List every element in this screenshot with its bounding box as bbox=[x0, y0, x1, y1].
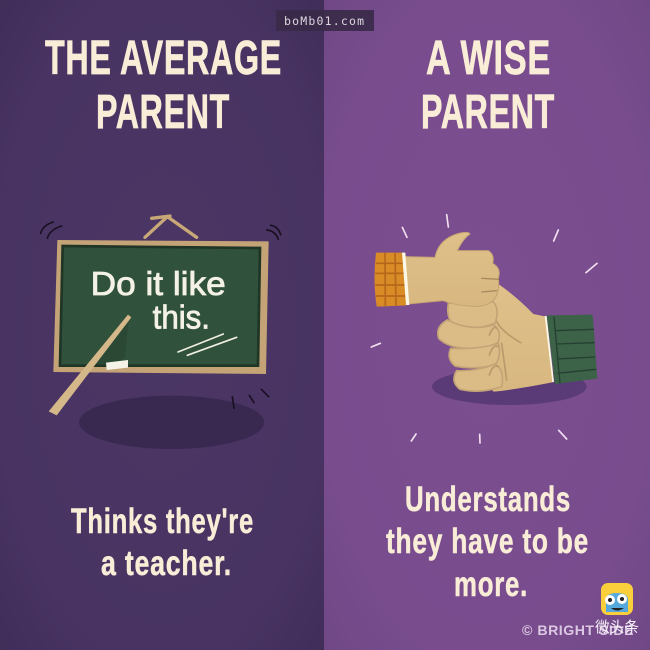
caption: thinks they're a teacher: a teacher. bbox=[101, 544, 232, 583]
panel: wise parent bbox=[324, 0, 650, 650]
pointer shadow bbox=[88, 323, 128, 367]
child hand bbox=[405, 232, 499, 306]
caption: understands they have to be more bbox=[386, 480, 589, 604]
pointer stick bbox=[49, 315, 131, 415]
caption: understands they have to be more: Understands bbox=[405, 480, 571, 519]
watermark: bomb01.com bbox=[276, 10, 374, 31]
panel: average parent bbox=[0, 0, 324, 650]
heading: a wise parent: PARENT bbox=[421, 86, 555, 139]
heading: a wise parent: A WISE bbox=[426, 32, 551, 85]
chalk piece bbox=[106, 360, 128, 370]
thumb and palm lines bbox=[489, 322, 521, 380]
knit pattern bbox=[375, 253, 406, 306]
heading: the average parent bbox=[45, 32, 282, 139]
parent palm bbox=[450, 284, 554, 392]
hanging string bbox=[145, 216, 197, 237]
logo label: toutiao: 微头条 bbox=[595, 619, 639, 636]
illustration: child hand held by parent hand bbox=[371, 215, 597, 443]
heading: a wise parent bbox=[421, 32, 555, 139]
green sleeve bbox=[547, 315, 597, 384]
orange sleeve bbox=[374, 253, 407, 307]
hand shadow bbox=[432, 368, 587, 405]
shadow under the board bbox=[79, 396, 264, 449]
credit: bright side: © BRIGHT SIDE bbox=[522, 622, 634, 638]
caption: thinks they're a teacher bbox=[71, 502, 254, 583]
heading: the average parent: THE AVERAGE bbox=[45, 32, 282, 85]
caption: understands they have to be more: more. bbox=[454, 565, 528, 604]
motion marks bbox=[41, 222, 281, 408]
child finger lines bbox=[482, 278, 498, 292]
board frame bbox=[53, 240, 269, 374]
sleeve stripes bbox=[554, 317, 596, 383]
parent fingers bbox=[438, 302, 502, 391]
white cuffs bbox=[402, 253, 554, 382]
green board bbox=[60, 246, 260, 366]
chalk underline strokes bbox=[178, 334, 237, 355]
heading: the average parent: PARENT bbox=[96, 86, 230, 139]
chalk writing: Do it like bbox=[91, 266, 226, 303]
logo: toutiao app icon bbox=[601, 583, 633, 615]
watermark: bomb01.com: boMb01.com bbox=[284, 14, 364, 28]
caption: understands they have to be more: they have to be bbox=[386, 522, 589, 561]
caption: thinks they're a teacher: Thinks they're bbox=[71, 502, 254, 541]
illustration: chalkboard bbox=[41, 216, 281, 449]
illustration: chalkboard: this. bbox=[153, 300, 210, 337]
sparkle marks bbox=[371, 215, 597, 443]
